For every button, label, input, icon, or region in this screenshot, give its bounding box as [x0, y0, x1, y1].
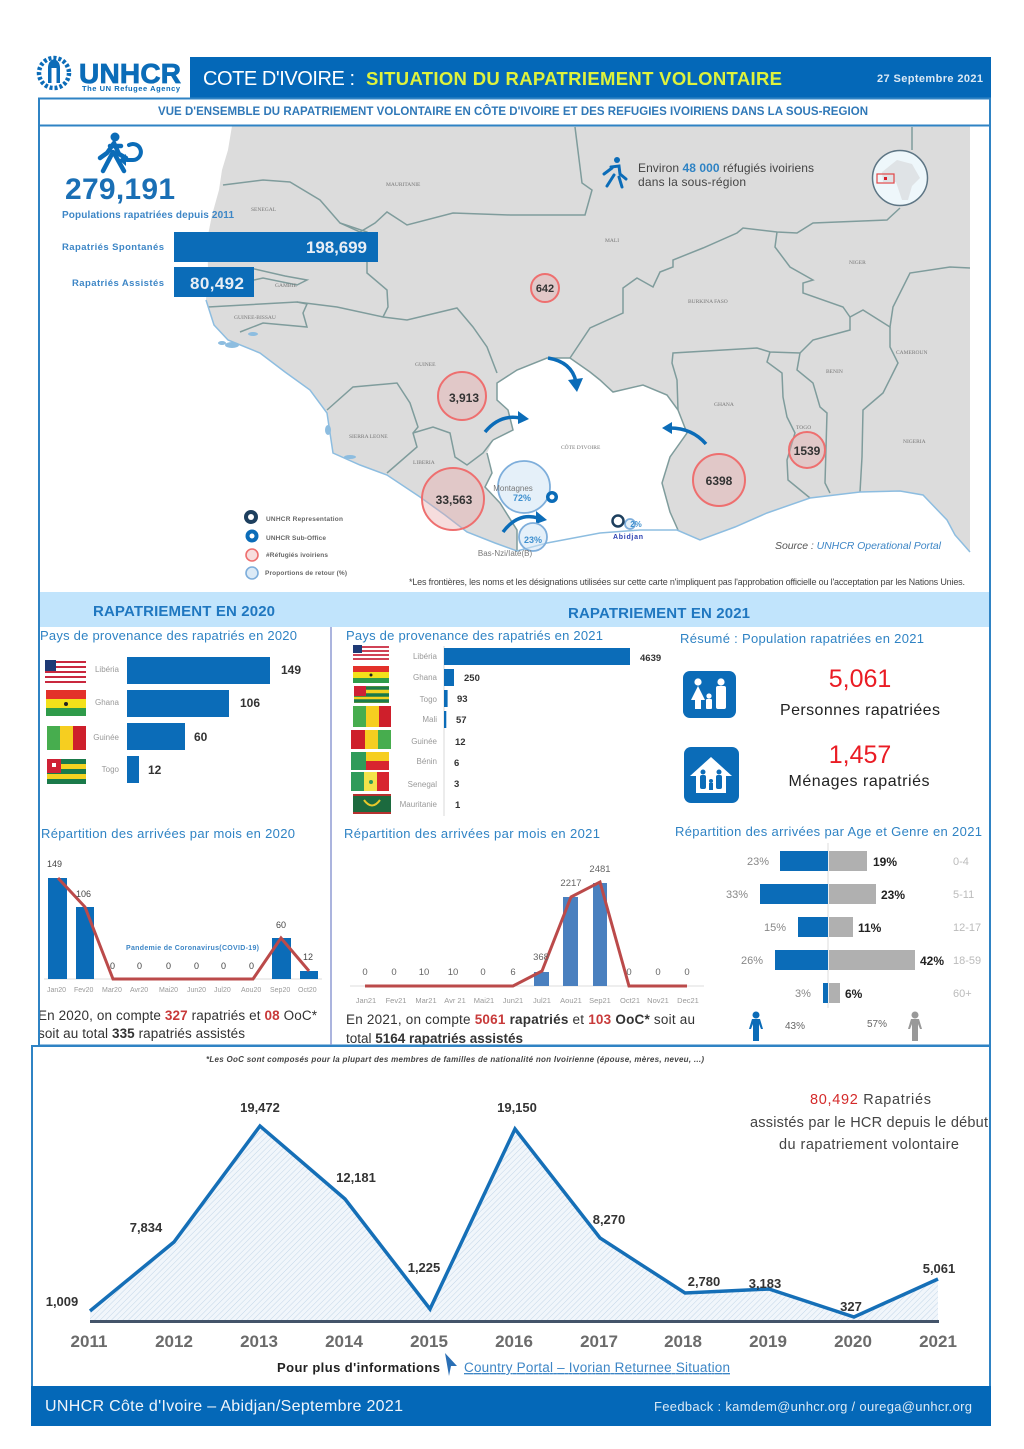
chart: arrivals by month 2020: Mar20 — [102, 987, 122, 994]
coastal islands — [218, 332, 356, 459]
chart: age and gender 2021: 18-59 — [953, 955, 981, 967]
flag: Mali — [353, 706, 391, 727]
chart: arrivals by month 2020: Jun20 — [187, 987, 206, 994]
chart: arrivals by month 2021: 2481 — [589, 864, 611, 875]
country names: GAMBIE — [275, 283, 297, 289]
chart: arrivals by month 2020: Mai20 — [159, 987, 178, 994]
panel: provenance 2021: 3 — [454, 779, 459, 790]
chart: arrivals by month 2021: 0 — [480, 967, 486, 978]
area — [90, 1126, 938, 1320]
more information link: Country Portal – Ivorian Returnee Situation — [464, 1360, 730, 1375]
flag: Guinea — [351, 730, 391, 749]
chart: arrivals by month 2021: Répartition des arrivées par mois en 2021 — [344, 826, 600, 841]
chart: repatriated per year: 1,225 — [408, 1260, 440, 1275]
key figure: total repatriated: 279,191 — [65, 173, 175, 206]
panel: provenance 2021: Libéria — [413, 652, 438, 661]
chart: repatriated per year: 2019 — [749, 1332, 787, 1351]
panel: provenance 2021: Mali — [422, 715, 437, 724]
flag: Togo — [354, 686, 389, 703]
chart: age and gender 2021: 33% — [726, 889, 748, 901]
callout: refugees in sub-region: dans la sous-région — [638, 175, 746, 189]
chart: arrivals by month 2020: soit au total 335 rapatriés assistés — [38, 1026, 245, 1041]
chart: repatriated per year: 2011 — [71, 1332, 107, 1351]
country borders — [223, 180, 388, 317]
flag: Senegal — [351, 772, 389, 791]
chart: age and gender 2021: 19% — [873, 855, 897, 869]
key figure: total repatriated: 198,699 — [306, 238, 367, 257]
panel: provenance 2021: Senegal — [408, 780, 437, 789]
country names: LIBERIA — [413, 460, 435, 466]
chart: repatriated per year: 2020 — [834, 1332, 872, 1351]
panel: provenance 2021: Togo — [420, 695, 438, 704]
chart: arrivals by month 2021: Dec21 — [677, 996, 699, 1005]
section band — [39, 592, 990, 627]
panel: provenance 2021: Ghana — [413, 673, 438, 682]
chart: age and gender 2021: 3% — [795, 988, 811, 1000]
flag: Guinea — [47, 726, 86, 750]
refugee circles: 33,563 — [436, 493, 473, 507]
country names: BENIN — [826, 369, 843, 375]
chart: arrivals by month 2021: total 5164 rapatriés assistés — [346, 1031, 523, 1046]
callout: assisted total — [750, 1092, 988, 1153]
icon: male — [749, 1012, 763, 1041]
icon: cursor — [445, 1353, 457, 1376]
office markers — [546, 491, 624, 526]
chart: arrivals by month 2021: En 2021, on compte 5061 rapatriés et 103 OoC* soit au — [346, 1012, 695, 1027]
chart: arrivals by month 2021: Nov21 — [647, 996, 669, 1005]
flag: Liberia — [45, 660, 86, 685]
chart: arrivals by month 2020: 149 — [47, 859, 62, 869]
country names: CAMEROUN — [896, 350, 928, 356]
chart: age and gender 2021: 23% — [881, 888, 905, 902]
callout: assisted total: 80,492 Rapatriés — [810, 1092, 931, 1108]
chart: repatriated per year: 19,472 — [240, 1100, 280, 1115]
map legend: #Réfugiés ivoiriens — [266, 552, 328, 559]
chart: arrivals by month 2021: 0 — [626, 967, 632, 978]
country names: SENEGAL — [251, 207, 277, 213]
chart: arrivals by month 2021: Aou21 — [560, 996, 582, 1005]
chart: arrivals by month 2020: Sep20 — [270, 987, 290, 994]
chart: arrivals by month 2020: Fev20 — [74, 987, 94, 994]
chart: arrivals by month 2021: Jan21 — [356, 996, 376, 1005]
callout: assisted total: du rapatriement volontaire — [779, 1137, 959, 1153]
flag: Ghana — [353, 666, 389, 683]
chart: age and gender 2021: 11% — [858, 921, 882, 935]
flag: Togo — [47, 759, 86, 784]
chart: repatriated per year: 2016 — [495, 1332, 533, 1351]
chart: arrivals by month 2020: Oct20 — [298, 987, 317, 994]
key figure: total repatriated: Rapatriés Assistés — [72, 278, 164, 289]
icon: returning person — [100, 132, 141, 171]
chart: arrivals by month 2021: 0 — [362, 967, 368, 978]
map source: Source : UNHCR Operational Portal — [775, 540, 942, 552]
panel: provenance 2020: 149 — [281, 663, 301, 677]
panel: provenance 2021: 1 — [455, 800, 461, 811]
map legend: UNHCR Representation — [266, 516, 343, 523]
logo: UNHCR: UNHCR — [79, 58, 181, 89]
map legend: Proportions de retour (%) — [265, 570, 347, 577]
chart: arrivals by month 2021: 2217 — [560, 878, 582, 889]
icon: fleeing person — [604, 157, 626, 187]
country names: NIGERIA — [903, 439, 926, 445]
chart: arrivals by month 2020: Répartition des arrivées par mois en 2020 — [41, 826, 295, 841]
flag: Benin — [351, 752, 389, 770]
panel: summary 2021: 1,457 — [829, 741, 891, 769]
panel: provenance 2020: 12 — [148, 763, 162, 777]
panel: provenance 2020: Guinée — [93, 733, 120, 742]
OoC footnote: *Les OoC sont composés pour la plupart des membres de familles de nationalité non Ivoirienne (épouse, mères, neveu, ...) — [206, 1055, 704, 1064]
chart: arrivals by month 2020: 0 — [249, 961, 254, 971]
chart: arrivals by month 2020: Jan20 — [47, 987, 66, 994]
chart: arrivals by month 2021: 0 — [391, 967, 397, 978]
locator globe — [872, 150, 928, 206]
panel: summary 2021: 5,061 — [829, 665, 891, 693]
chart: age and gender 2021: 23% — [747, 856, 769, 868]
chart: arrivals by month 2021: Oct21 — [620, 996, 640, 1005]
flag: Liberia — [353, 645, 389, 663]
map: West Africa — [206, 126, 970, 558]
panel: provenance 2020: Ghana — [95, 698, 120, 707]
chart: arrivals by month 2020: Avr20 — [130, 987, 148, 994]
country names: TOGO — [796, 425, 811, 431]
chart: arrivals by month 2020: 0 — [110, 961, 115, 971]
panel: provenance 2021: 250 — [464, 673, 480, 684]
panel: provenance 2021: Mauritanie — [400, 800, 438, 809]
chart: arrivals by month 2020: Jul20 — [214, 987, 231, 994]
panel: summary 2021: Personnes rapatriées — [780, 702, 940, 719]
chart: repatriated per year: 12,181 — [336, 1170, 376, 1185]
key figure: total repatriated — [62, 132, 378, 297]
chart: age and gender 2021: 5-11 — [953, 889, 974, 901]
chart: arrivals by month 2021: 10 — [448, 967, 458, 978]
chart: repatriated per year: 2,780 — [688, 1274, 720, 1289]
chart: repatriated per year — [46, 1100, 957, 1351]
key figure: total repatriated: Populations rapatriées depuis 2011 — [62, 210, 234, 221]
title banner: COTE D'IVOIRE : — [203, 68, 355, 90]
chart: repatriated per year: 2018 — [664, 1332, 702, 1351]
map legend: UNHCR Sub-Office — [266, 535, 326, 542]
chart: age and gender 2021: 15% — [764, 922, 786, 934]
panel: provenance 2021: Guinée — [411, 737, 438, 746]
chart: arrivals by month 2021: Mar21 — [415, 996, 437, 1005]
Côte d'Ivoire — [485, 358, 687, 551]
map legend — [244, 510, 347, 579]
chart: age and gender 2021 — [675, 824, 982, 1041]
country names — [234, 182, 928, 466]
chart: arrivals by month 2020: Aou20 — [241, 987, 261, 994]
chart: arrivals by month 2021: Fev21 — [386, 996, 406, 1005]
logo: UNHCR: The UN Refugee Agency — [82, 84, 181, 93]
chart: repatriated per year: 3,183 — [749, 1276, 781, 1291]
panel: provenance 2021: 12 — [455, 737, 466, 748]
panel: provenance 2021: Pays de provenance des rapatriés en 2021 — [346, 628, 603, 643]
country names: GUINEE-BISSAU — [234, 315, 276, 321]
chart: repatriated per year: 19,150 — [497, 1100, 537, 1115]
refugee circles: 6398 — [706, 474, 733, 488]
panel: summary 2021: Résumé : Population rapatriées en 2021 — [680, 631, 924, 646]
chart: arrivals by month 2020: 0 — [194, 961, 199, 971]
icon: household — [684, 747, 739, 803]
country names: GUINEE — [415, 362, 436, 368]
chart: repatriated per year: 2014 — [325, 1332, 363, 1351]
panel: provenance 2020: Libéria — [95, 665, 120, 674]
chart: repatriated per year: 1,009 — [46, 1294, 78, 1309]
title banner — [190, 57, 991, 98]
refugee circles — [422, 274, 825, 558]
panel: provenance 2021: 93 — [457, 694, 468, 705]
refugee circles: Abidjan — [613, 534, 643, 541]
country names: MAURITANIE — [386, 182, 421, 188]
flow arrows — [485, 358, 706, 532]
chart: age and gender 2021: 60+ — [953, 988, 972, 1000]
chart: age and gender 2021: 12-17 — [953, 922, 981, 934]
refugee circles: 72% — [513, 493, 531, 503]
chart: repatriated per year: 5,061 — [923, 1261, 955, 1276]
chart: arrivals by month 2021: 10 — [419, 967, 429, 978]
chart: arrivals by month 2021: 368 — [533, 952, 549, 963]
coastline — [206, 300, 970, 552]
chart: arrivals by month 2020: 0 — [137, 961, 142, 971]
chart: arrivals by month 2021: Mai21 — [474, 996, 494, 1005]
chart: arrivals by month 2021 — [344, 826, 704, 1046]
refugee circles: Bas-Nzi/Iaté(B) — [478, 549, 532, 558]
refugee circles: 642 — [536, 283, 554, 295]
chart: repatriated per year: 2013 — [240, 1332, 278, 1351]
chart: arrivals by month 2021: Sep21 — [589, 996, 611, 1005]
panel: provenance 2020: 60 — [194, 730, 208, 744]
refugee circles: Montagnes — [493, 484, 533, 493]
chart: repatriated per year: 2017 — [580, 1332, 618, 1351]
panel: provenance 2020: 106 — [240, 696, 260, 710]
section band: RAPATRIEMENT EN 2021 — [568, 605, 750, 622]
chart: age and gender 2021: 43% — [785, 1021, 805, 1032]
flag: Ghana — [46, 690, 86, 716]
chart: age and gender 2021: Répartition des arrivées par Age et Genre en 2021 — [675, 824, 982, 839]
refugee circles: 2% — [630, 520, 642, 529]
panel: provenance 2021 — [346, 628, 661, 816]
key figure: total repatriated: Rapatriés Spontanés — [62, 242, 164, 253]
chart: arrivals by month 2020: Pandemie de Coronavirus(COVID-19) — [126, 945, 259, 952]
country names: CÔTE D'IVOIRE — [561, 443, 601, 451]
subtitle band — [39, 98, 990, 126]
section band: RAPATRIEMENT EN 2020 — [93, 603, 275, 620]
chart: repatriated per year: 7,834 — [130, 1220, 163, 1235]
callout: refugees in sub-region — [604, 157, 814, 189]
country names: NIGER — [849, 260, 866, 266]
logo: UNHCR — [39, 58, 181, 93]
callout: assisted total: assistés par le HCR depuis le début — [750, 1115, 988, 1131]
flag: Mauritania — [353, 794, 391, 814]
title banner: 27 Septembre 2021 — [877, 73, 983, 85]
chart: age and gender 2021: 6% — [845, 987, 863, 1001]
chart: arrivals by month 2021: Jun21 — [503, 996, 523, 1005]
refugee circles: 23% — [524, 535, 542, 545]
panel: provenance 2021: 6 — [454, 758, 459, 769]
chart: age and gender 2021: 0-4 — [953, 856, 969, 868]
panel: provenance 2021: Bénin — [417, 757, 437, 766]
chart: arrivals by month 2020: En 2020, on compte 327 rapatriés et 08 OoC* — [38, 1008, 318, 1023]
more information link: Pour plus d'informations — [277, 1360, 440, 1375]
chart: repatriated per year: 2012 — [155, 1332, 193, 1351]
chart: age and gender 2021: 57% — [867, 1019, 887, 1030]
refugee circles: 3,913 — [449, 391, 479, 405]
chart: arrivals by month 2020: 106 — [76, 889, 91, 899]
icon: family — [683, 671, 736, 718]
chart: repatriated per year: 8,270 — [593, 1212, 625, 1227]
icon: female — [908, 1012, 922, 1041]
title banner: SITUATION DU RAPATRIEMENT VOLONTAIRE — [366, 68, 782, 89]
refugee circles: 1539 — [794, 444, 821, 458]
panel: provenance 2021: 4639 — [640, 653, 661, 664]
chart: repatriated per year: 327 — [840, 1299, 862, 1314]
panel: provenance 2021: 57 — [456, 715, 467, 726]
country names: MALI — [605, 238, 619, 244]
chart: arrivals by month 2020: 0 — [221, 961, 226, 971]
map disclaimer: *Les frontières, les noms et les désignations utilisées sur cette carte n'impliquent pas l'approbation officielle ou l'acceptation par les Nations Unies. — [409, 577, 965, 587]
footer: Feedback : kamdem@unhcr.org / ourega@unhcr.org — [654, 1399, 972, 1414]
chart: arrivals by month 2021: Jul21 — [533, 996, 551, 1005]
panel: provenance 2020: Togo — [102, 765, 120, 774]
subtitle band: VUE D'ENSEMBLE DU RAPATRIEMENT VOLONTAIRE EN CÔTE D'IVOIRE ET DES REFUGIES IVOIRIENS DANS LA SOUS-REGION — [158, 105, 868, 118]
key figure: total repatriated: 80,492 — [190, 274, 244, 293]
chart: arrivals by month 2021: 0 — [655, 967, 661, 978]
callout: refugees in sub-region: Environ 48 000 réfugiés ivoiriens — [638, 161, 814, 175]
country names: GHANA — [714, 402, 734, 408]
chart: arrivals by month 2021: Avr 21 — [444, 996, 466, 1005]
chart: age and gender 2021: 26% — [741, 955, 763, 967]
chart: arrivals by month 2021: 6 — [510, 967, 516, 978]
country names: BURKINA FASO — [688, 299, 728, 305]
chart: arrivals by month 2020: 0 — [166, 961, 171, 971]
more information link — [277, 1353, 730, 1376]
panel: provenance 2020 — [40, 628, 301, 784]
country names: SIERRA LEONE — [349, 434, 388, 440]
panel: summary 2021: Ménages rapatriés — [788, 773, 930, 790]
panel: provenance 2020: Pays de provenance des rapatriés en 2020 — [40, 628, 297, 643]
chart: arrivals by month 2021: 0 — [684, 967, 690, 978]
chart: repatriated per year: 2015 — [410, 1332, 448, 1351]
footer: UNHCR Côte d'Ivoire – Abidjan/Septembre 2021 — [45, 1398, 403, 1415]
chart: age and gender 2021: 42% — [920, 954, 944, 968]
panel: summary 2021 — [680, 631, 940, 803]
chart: arrivals by month 2020 — [38, 826, 322, 1041]
footer — [31, 1386, 991, 1426]
chart: repatriated per year: 2021 — [919, 1332, 957, 1351]
chart: arrivals by month 2020: 60 — [276, 920, 286, 930]
chart: arrivals by month 2020: 12 — [303, 952, 313, 962]
land mass — [206, 126, 970, 552]
